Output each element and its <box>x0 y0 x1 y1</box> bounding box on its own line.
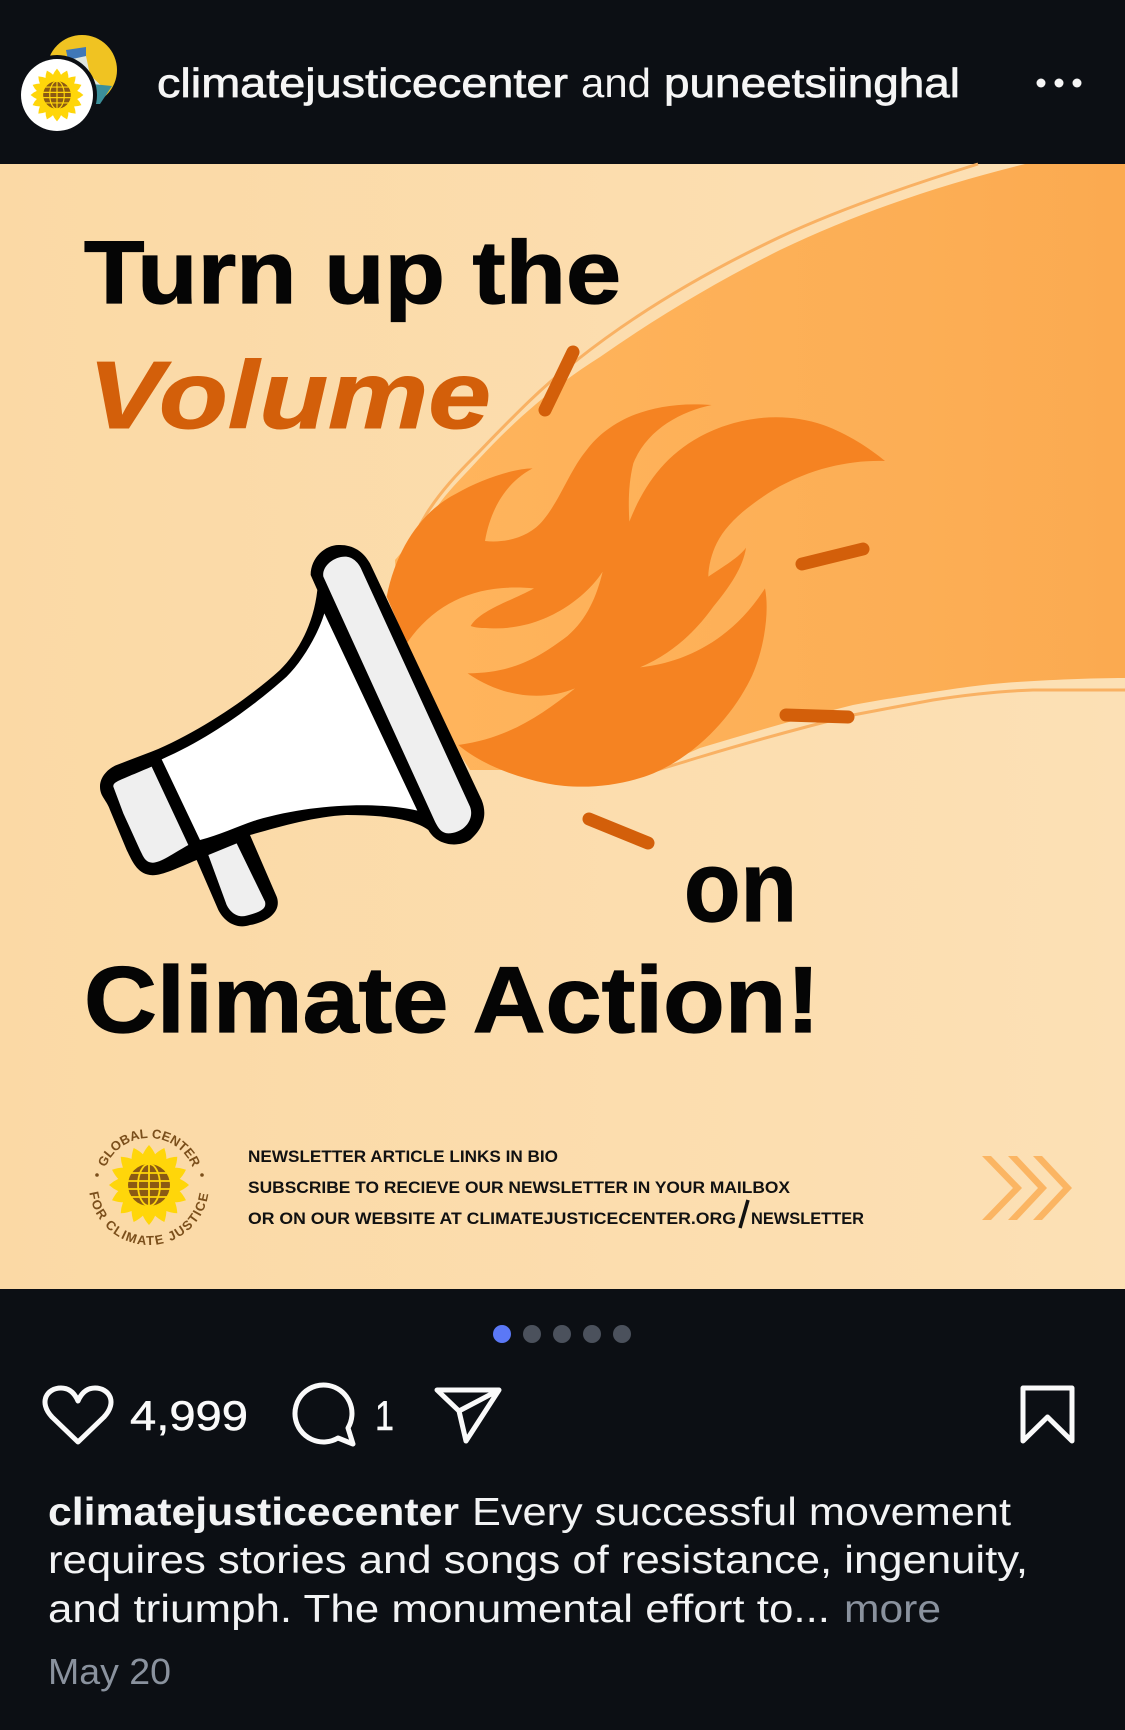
sound dashes <box>545 352 863 843</box>
next arrows icon <box>982 1156 1072 1220</box>
newsletter text <box>248 1147 864 1228</box>
megaphone body <box>162 613 417 840</box>
stream outlines <box>420 164 1125 772</box>
caption: climatejusticecenter <box>48 1491 459 1534</box>
logo ring text: GLOBAL CENTER <box>98 1130 200 1168</box>
orange stream <box>395 164 1125 770</box>
newsletter text: SUBSCRIBE TO RECIEVE OUR NEWSLETTER IN YOUR MAILBOX <box>248 1178 791 1197</box>
comment count: 1 <box>375 1392 394 1439</box>
avatar: sunflower logo <box>17 55 97 135</box>
date: May 20 <box>48 1651 171 1692</box>
like count: 4,999 <box>130 1392 248 1439</box>
account names: puneetsiinghal <box>664 60 960 106</box>
avatars <box>17 35 117 135</box>
icon: bookmark <box>1023 1388 1072 1441</box>
cream background <box>0 164 1125 1289</box>
flame <box>387 404 885 787</box>
icon: share <box>437 1390 499 1441</box>
caption <box>48 1491 1028 1631</box>
megaphone icon <box>100 545 484 926</box>
newsletter text: NEWSLETTER <box>751 1209 864 1228</box>
caption: more <box>844 1588 941 1631</box>
more menu icon <box>1036 78 1082 88</box>
newsletter text: OR ON OUR WEBSITE AT CLIMATEJUSTICECENTER.ORG <box>248 1209 736 1228</box>
caption: Every successful movement <box>472 1491 1011 1534</box>
post image panel <box>0 162 1125 1289</box>
account names <box>157 60 960 106</box>
megaphone bell rim <box>323 557 471 833</box>
headline: climate action: Climate Action! <box>84 947 820 1052</box>
megaphone rear cap <box>113 767 188 863</box>
avatar: yellow profile <box>47 35 117 105</box>
organisation logo <box>90 1130 208 1245</box>
caption: and triumph. The monumental effort to... <box>48 1588 830 1631</box>
action bar <box>45 1385 1072 1444</box>
headline: volume: Volume <box>88 342 491 449</box>
megaphone black silhouette <box>100 545 484 926</box>
carousel dots <box>493 1325 631 1343</box>
logo ring text: FOR CLIMATE JUSTICE <box>90 1192 208 1245</box>
header <box>17 35 1082 135</box>
icon: heart <box>45 1388 111 1442</box>
account names: climatejusticecenter <box>157 60 568 106</box>
headline: turn up the: Turn up the <box>84 222 621 322</box>
headline: on: on <box>684 831 797 943</box>
logo ring text <box>90 1130 208 1245</box>
logo sunflower <box>109 1145 189 1225</box>
caption: requires stories and songs of resistance, ingenuity, <box>48 1539 1028 1582</box>
account names: and <box>581 60 651 106</box>
megaphone handle <box>208 843 265 916</box>
icon: comment <box>295 1385 353 1444</box>
newsletter text: NEWSLETTER ARTICLE LINKS IN BIO <box>248 1147 558 1166</box>
